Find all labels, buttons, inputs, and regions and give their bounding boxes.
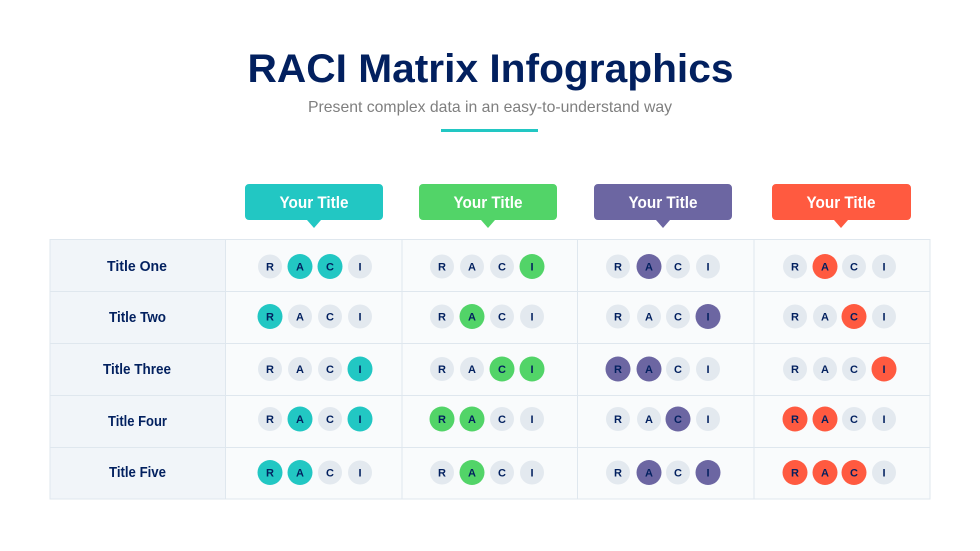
row 4, column 1: A and I active	[258, 406, 372, 432]
row 5, column 2: A active: C	[498, 468, 506, 480]
row 3, column 4: I active: I	[882, 364, 886, 376]
row 5, column 3: A and I active	[606, 460, 720, 485]
row 4, column 2: R and A active: C	[498, 414, 506, 426]
row 2, column 1: R active: R	[266, 312, 274, 324]
row 1, column 4: A active	[783, 254, 896, 279]
header: column four	[772, 184, 911, 228]
row 1, column 4: A active: I	[882, 262, 886, 274]
row 5, column 3: A and I active: A	[645, 468, 653, 480]
row label: Title Three: Title Three	[103, 362, 171, 378]
header: column four: Your Title	[806, 193, 876, 212]
row 4, column 4: R and A active: C	[850, 414, 858, 426]
row 1, column 2: I active	[430, 254, 544, 279]
subtitle: Present complex data in an easy-to-understand way	[308, 99, 672, 116]
row 4, column 4: R and A active	[782, 406, 896, 432]
row 1, column 1: A and C active: C	[326, 262, 334, 274]
row 5, column 4: R, A and C active	[782, 460, 896, 485]
header: column two: Your Title	[454, 193, 522, 212]
header: column three: Your Title	[628, 193, 698, 212]
row 5, column 1: R and A active: C	[326, 468, 334, 480]
row 3, column 2: C and I active: I	[530, 364, 534, 376]
row 1, column 4: A active: A	[821, 262, 829, 274]
header: column one: Your Title	[280, 193, 348, 212]
row 3, column 2: C and I active: C	[498, 364, 506, 376]
title underline accent	[441, 129, 538, 132]
row 2, column 2: A active: C	[498, 312, 506, 324]
row 4, column 2: R and A active	[430, 406, 544, 432]
row 4, column 1: A and I active: R	[266, 414, 274, 426]
row 1, column 3: A active: R	[614, 262, 622, 274]
row 2, column 4: C active: A	[821, 312, 829, 324]
row 4, column 1: A and I active: A	[296, 414, 304, 426]
row 3, column 2: C and I active	[430, 356, 544, 382]
row 3, column 4: I active	[783, 356, 896, 382]
row 1, column 1: A and C active	[258, 254, 372, 279]
row 4, column 4: R and A active: I	[882, 414, 886, 426]
row 2, column 1: R active: I	[358, 312, 362, 324]
row 1, column 2: I active: C	[498, 262, 506, 274]
row 1, column 1: A and C active: A	[296, 262, 304, 274]
row 1, column 4: A active: C	[850, 262, 858, 274]
row 5, column 1: R and A active: A	[296, 468, 304, 480]
row 5, column 4: R, A and C active: R	[791, 468, 799, 480]
row 5, column 2: A active: R	[438, 468, 446, 480]
row labels	[103, 259, 171, 481]
row 1, column 2: I active: A	[468, 262, 476, 274]
row 1, column 3: A active	[606, 254, 720, 279]
row 4, column 2: R and A active: I	[530, 414, 534, 426]
row 5, column 3: A and I active: I	[706, 468, 710, 480]
row 4, column 1: A and I active: I	[358, 414, 362, 426]
row 5, column 4: R, A and C active: C	[850, 468, 858, 480]
row 3, column 3: R and A active: I	[706, 364, 710, 376]
row 5, column 3: A and I active: C	[674, 468, 682, 480]
row 4, column 1: A and I active: C	[326, 414, 334, 426]
row 2, column 4: C active: I	[882, 312, 886, 324]
row 4, column 3: C active: C	[674, 414, 682, 426]
row 4, column 4: R and A active: R	[791, 414, 799, 426]
row label: Title One: Title One	[107, 259, 167, 275]
row 3, column 4: I active: R	[791, 364, 799, 376]
title: RACI Matrix Infographics	[248, 47, 734, 91]
row 2, column 4: C active	[783, 304, 896, 329]
row 4, column 3: C active: I	[706, 414, 710, 426]
row 5, column 1: R and A active: R	[266, 468, 274, 480]
row 2, column 3: I active: C	[674, 312, 682, 324]
row 2, column 3: I active	[606, 304, 720, 329]
row 1, column 2: I active: R	[438, 262, 446, 274]
row 5, column 2: A active: A	[468, 468, 476, 480]
row 3, column 1: I active: I	[358, 364, 362, 376]
row 3, column 1: I active	[258, 356, 372, 382]
header: column three	[594, 184, 732, 228]
row 2, column 1: R active: A	[296, 312, 304, 324]
row 2, column 1: R active: C	[326, 312, 334, 324]
row 1, column 1: A and C active: R	[266, 262, 274, 274]
row 3, column 1: I active: R	[266, 364, 274, 376]
row 3, column 3: R and A active: A	[645, 364, 653, 376]
row 3, column 2: C and I active: A	[468, 364, 476, 376]
row label: Title Four: Title Four	[108, 414, 167, 430]
row 5, column 2: A active: I	[530, 468, 534, 480]
row 1, column 3: A active: C	[674, 262, 682, 274]
row 2, column 2: A active: I	[530, 312, 534, 324]
row 3, column 4: I active: C	[850, 364, 858, 376]
row 2, column 2: A active: R	[438, 312, 446, 324]
row 4, column 3: C active: R	[614, 414, 622, 426]
row 3, column 3: R and A active: R	[614, 364, 622, 376]
row 3, column 1: I active: A	[296, 364, 304, 376]
row 2, column 2: A active: A	[468, 312, 476, 324]
header: column one	[245, 184, 383, 228]
row 1, column 3: A active: A	[645, 262, 653, 274]
row 2, column 2: A active	[430, 304, 544, 329]
row 5, column 4: R, A and C active: A	[821, 468, 829, 480]
row 4, column 2: R and A active: A	[468, 414, 476, 426]
column headers	[245, 184, 911, 228]
row 2, column 4: C active: R	[791, 312, 799, 324]
row 1, column 3: A active: I	[706, 262, 710, 274]
row 3, column 4: I active: A	[821, 364, 829, 376]
row 5, column 1: R and A active: I	[358, 468, 362, 480]
row 4, column 4: R and A active: A	[821, 414, 829, 426]
row 3, column 1: I active: C	[326, 364, 334, 376]
row 2, column 3: I active: A	[645, 312, 653, 324]
row 4, column 2: R and A active: R	[438, 414, 446, 426]
row 5, column 4: R, A and C active: I	[882, 468, 886, 480]
row 2, column 4: C active: C	[850, 312, 858, 324]
row 5, column 2: A active	[430, 460, 544, 485]
row 4, column 3: C active	[606, 406, 720, 432]
row 2, column 3: I active: I	[706, 312, 710, 324]
row 4, column 3: C active: A	[645, 414, 653, 426]
RACI table	[50, 239, 930, 499]
row 1, column 4: A active: R	[791, 262, 799, 274]
header: column two	[419, 184, 557, 228]
row 5, column 3: A and I active: R	[614, 468, 622, 480]
row 1, column 1: A and C active: I	[358, 262, 362, 274]
row label: Title Five: Title Five	[109, 465, 166, 481]
row 3, column 3: R and A active: C	[674, 364, 682, 376]
row 3, column 3: R and A active	[606, 356, 720, 382]
row 3, column 2: C and I active: R	[438, 364, 446, 376]
row 2, column 3: I active: R	[614, 312, 622, 324]
row 5, column 1: R and A active	[258, 460, 372, 485]
row label: Title Two: Title Two	[109, 310, 166, 326]
row 1, column 2: I active: I	[530, 262, 534, 274]
row 2, column 1: R active	[258, 304, 372, 329]
